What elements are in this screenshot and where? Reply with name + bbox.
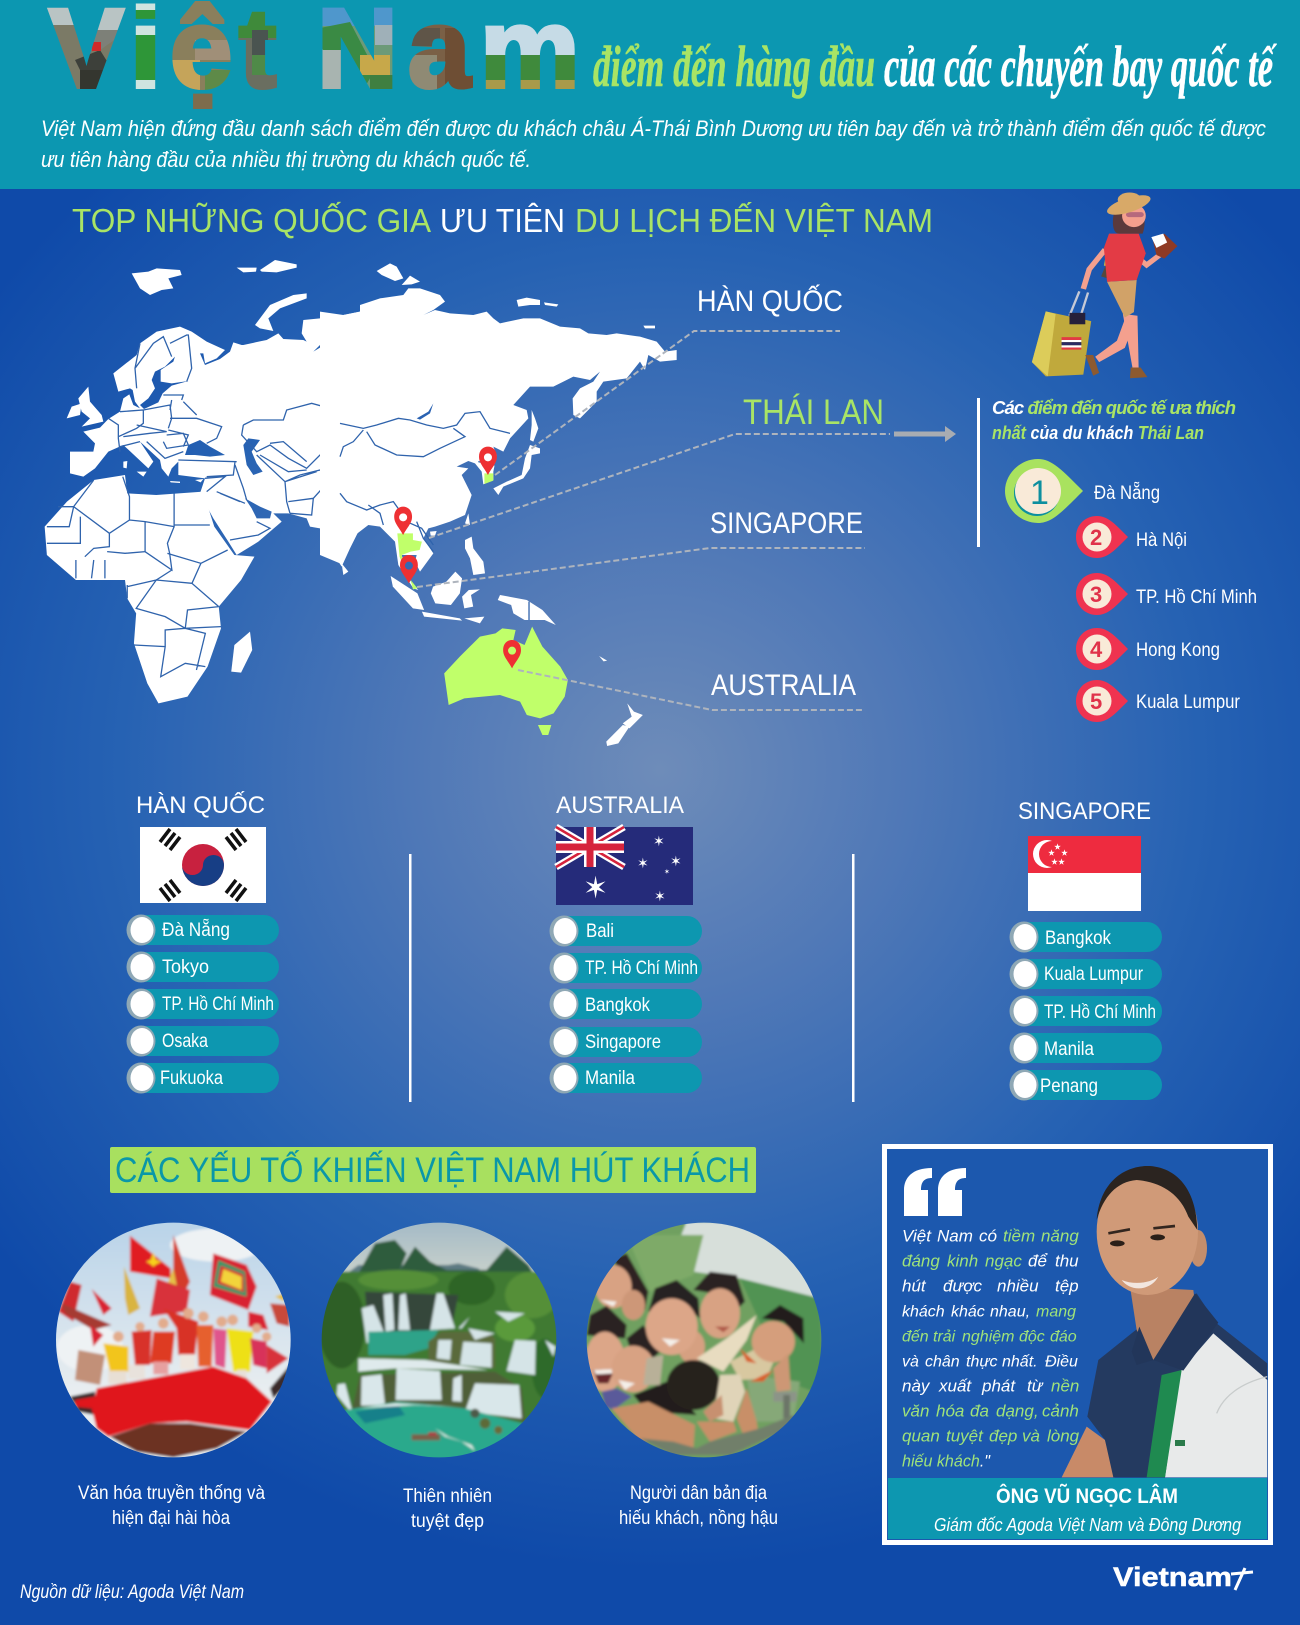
name band: [888, 1478, 1267, 1539]
arrow to Thailand panel: [894, 426, 956, 442]
rank 4: [1076, 628, 1220, 670]
quote text: khác: [951, 1304, 985, 1320]
highlighted countries: [397, 473, 568, 735]
item: Bali: [586, 921, 614, 942]
caption: people: Người dân bản địa: [630, 1482, 767, 1504]
banner: factors attracting visitors: CÁC YẾU TỐ KHIẾN VIỆT NAM HÚT KHÁCH: [115, 1150, 750, 1190]
item: Bangkok: [585, 995, 650, 1016]
portrait: [1062, 1166, 1267, 1477]
flag: Australia: ✶: [664, 868, 670, 876]
map label: Australia: AUSTRALIA: [711, 669, 856, 702]
rank 1: 1: [1030, 474, 1049, 512]
quote text: nhau,: [990, 1304, 1030, 1320]
Siberia and eastern Asia: [320, 263, 677, 590]
heading: AUSTRALIA: [556, 792, 684, 819]
header band: [0, 0, 1300, 189]
rank 1: Đà Nẵng: [1094, 483, 1160, 504]
quote text: nhiều: [997, 1276, 1039, 1296]
rank 3: 3: [1090, 582, 1102, 607]
item: [550, 1062, 702, 1094]
item: [126, 988, 279, 1020]
quote text: đáo: [1050, 1328, 1077, 1346]
flag: Singapore: ★: [1048, 849, 1055, 857]
divider left: [409, 854, 412, 1102]
quote text: quan: [902, 1426, 940, 1446]
quote text: được: [943, 1276, 983, 1296]
caption: culture: hiện đại hài hòa: [112, 1507, 230, 1529]
item: [126, 952, 279, 982]
item: [126, 1026, 279, 1056]
quote text: [902, 1226, 1080, 1470]
heading: HÀN QUỐC: [136, 791, 265, 819]
quote text: Việt: [902, 1226, 932, 1246]
item: Manila: [585, 1068, 635, 1089]
item: [1010, 958, 1162, 990]
Europe and western Asia: [67, 260, 360, 567]
item: Osaka: [162, 1031, 208, 1052]
quote text: chân: [925, 1354, 960, 1370]
item: [1010, 1070, 1162, 1100]
panel: Thai travellers' top destinations: [977, 397, 1257, 722]
flag: Australia: ✶: [583, 872, 608, 905]
vertical divider: [977, 398, 980, 547]
rank 4: 4: [1090, 637, 1103, 662]
caption: people: hiếu khách, nồng hậu: [619, 1507, 778, 1529]
quotation mark: [904, 1168, 966, 1216]
caption: nature: [403, 1485, 492, 1532]
flag: Australia: ✶: [637, 855, 649, 871]
quote text: lòng: [1047, 1426, 1080, 1446]
flag: South Korea: [140, 827, 266, 903]
item: [550, 1026, 702, 1058]
rank 2: [1076, 516, 1187, 558]
quote text: nhất.: [1002, 1354, 1038, 1370]
item: Singapore: [585, 1032, 661, 1053]
Africa and southern islands: [45, 475, 643, 746]
panel heading: Các điểm đến quốc tế ưa thích: [992, 397, 1236, 418]
quote frame: [884, 1146, 1270, 1542]
section heading: top countries: ƯU TIÊN: [440, 203, 565, 240]
map pins: [394, 447, 521, 668]
quote text: đa: [970, 1402, 989, 1420]
map label: Singapore: SINGAPORE: [710, 507, 863, 540]
dashed leader lines: [417, 331, 890, 710]
quote text: này: [902, 1376, 931, 1396]
item: [1010, 922, 1162, 952]
item: TP. Hồ Chí Minh: [162, 994, 274, 1015]
quote text: cảnh: [1042, 1402, 1079, 1420]
rank 5: 5: [1090, 689, 1102, 714]
panel: Singapore list: [1010, 798, 1162, 1100]
item: [1010, 996, 1162, 1026]
quote text: ngạc: [985, 1252, 1022, 1270]
quote text: khách: [902, 1304, 945, 1320]
quote text: và: [1022, 1426, 1040, 1446]
item: Manila: [1044, 1039, 1094, 1060]
quote text: nền: [1051, 1376, 1079, 1396]
rank 3: [1076, 573, 1257, 615]
panel: quote: [884, 1146, 1270, 1542]
item: [550, 916, 702, 946]
quote text: tuyệt: [946, 1426, 984, 1446]
quote text: năng: [1041, 1226, 1079, 1246]
panel heading line 2: nhất của du khách Thái Lan: [992, 422, 1204, 443]
item: [126, 914, 279, 946]
photo: festival: [56, 1222, 291, 1458]
quote text: hiếu khách.": [902, 1452, 991, 1470]
quote text: trải: [933, 1328, 956, 1346]
item: [550, 988, 702, 1020]
section heading: top countries: DU LỊCH ĐẾN VIỆT NAM: [575, 202, 933, 240]
quote text: phát: [981, 1376, 1016, 1396]
section heading: top countries: TOP NHỮNG QUỐC GIA: [72, 201, 432, 240]
caption: people: [619, 1482, 778, 1529]
intro text line 2: ưu tiên hàng đầu của nhiều thị trường du khách quốc tế.: [41, 147, 531, 172]
quote text: từ: [1027, 1376, 1044, 1396]
quote text: độc: [1019, 1328, 1045, 1346]
quote text: để: [1028, 1252, 1048, 1270]
caption: nature: tuyệt đẹp: [411, 1510, 484, 1532]
rank 3: TP. Hồ Chí Minh: [1136, 587, 1257, 608]
heading: SINGAPORE: [1018, 798, 1151, 825]
quote text: đến: [902, 1328, 929, 1346]
item: Bangkok: [1045, 928, 1111, 949]
icon: traveler with suitcase: [1032, 191, 1177, 378]
section heading: top countries: [72, 201, 933, 240]
divider right: [852, 854, 854, 1102]
quote text: văn: [902, 1402, 929, 1420]
rank 2: 2: [1090, 525, 1102, 550]
map label: Thái Lan: THÁI LAN: [743, 393, 884, 432]
world map: [45, 260, 677, 746]
rank 1: [1005, 459, 1160, 523]
rank 4: Hong Kong: [1136, 640, 1220, 661]
quote text: và: [902, 1354, 919, 1370]
quote text: nghiệm: [962, 1328, 1014, 1346]
rank 5: [1076, 680, 1241, 722]
panel: Australia list: [550, 792, 702, 1094]
caption: nature: Thiên nhiên: [403, 1485, 492, 1507]
item: Penang: [1040, 1076, 1098, 1097]
item: Kuala Lumpur: [1044, 964, 1144, 985]
flag: Australia: [556, 827, 693, 905]
quote text: có: [979, 1226, 997, 1246]
quote text: hút: [902, 1276, 927, 1296]
quote text: tiềm: [1003, 1226, 1035, 1246]
quote text: Nam: [937, 1226, 973, 1246]
item: [1010, 1032, 1162, 1064]
flag: Singapore: ★: [1058, 858, 1065, 866]
item: TP. Hồ Chí Minh: [585, 958, 698, 979]
caption: culture: [78, 1482, 265, 1529]
map label: Hàn Quốc: HÀN QUỐC: [697, 284, 843, 318]
item: Tokyo: [162, 957, 209, 978]
flag: Australia: ✶: [654, 888, 666, 904]
quote text: dạng,: [996, 1402, 1039, 1420]
flag: Australia: ✶: [653, 833, 665, 849]
flag: Australia: ✶: [670, 853, 682, 869]
item: [126, 1062, 279, 1094]
quote text: thực: [966, 1354, 997, 1370]
caption: culture: Văn hóa truyền thống và: [78, 1482, 265, 1504]
flag: Singapore: ★: [1061, 849, 1068, 857]
name band: Giám đốc Agoda Việt Nam và Đông Dương: [934, 1515, 1241, 1535]
rank 5: Kuala Lumpur: [1136, 692, 1241, 713]
logo: Vietnam+: Vietnam: [1113, 1562, 1232, 1592]
quote text: tệp: [1055, 1276, 1079, 1296]
quote text: đáng: [902, 1252, 940, 1270]
panel: Korea list: [126, 791, 279, 1094]
item: [550, 952, 702, 984]
source note: Nguồn dữ liệu: Agoda Việt Nam: [20, 1582, 244, 1603]
quote text: đẹp: [989, 1426, 1017, 1446]
subtitle green: điểm đến hàng đầu: [593, 34, 875, 99]
item: TP. Hồ Chí Minh: [1044, 1002, 1156, 1023]
quote text: mang: [1036, 1304, 1076, 1320]
photo: waterfall: [322, 1222, 556, 1458]
flag: Singapore: [1028, 836, 1141, 911]
photo: children: [586, 1222, 822, 1458]
item: Fukuoka: [160, 1068, 223, 1089]
item: Đà Nẵng: [162, 920, 230, 941]
flag: Singapore: ★: [1051, 858, 1058, 866]
flag: Singapore: ★: [1054, 843, 1061, 851]
quote text: Điều: [1045, 1354, 1078, 1370]
quote text: hóa: [936, 1402, 964, 1420]
quote text: thu: [1055, 1252, 1079, 1270]
name band: ÔNG VŨ NGỌC LÂM: [996, 1483, 1178, 1508]
quote text: xuất: [938, 1376, 972, 1396]
rank 2: Hà Nội: [1136, 530, 1187, 551]
quote text: kinh: [947, 1252, 978, 1270]
